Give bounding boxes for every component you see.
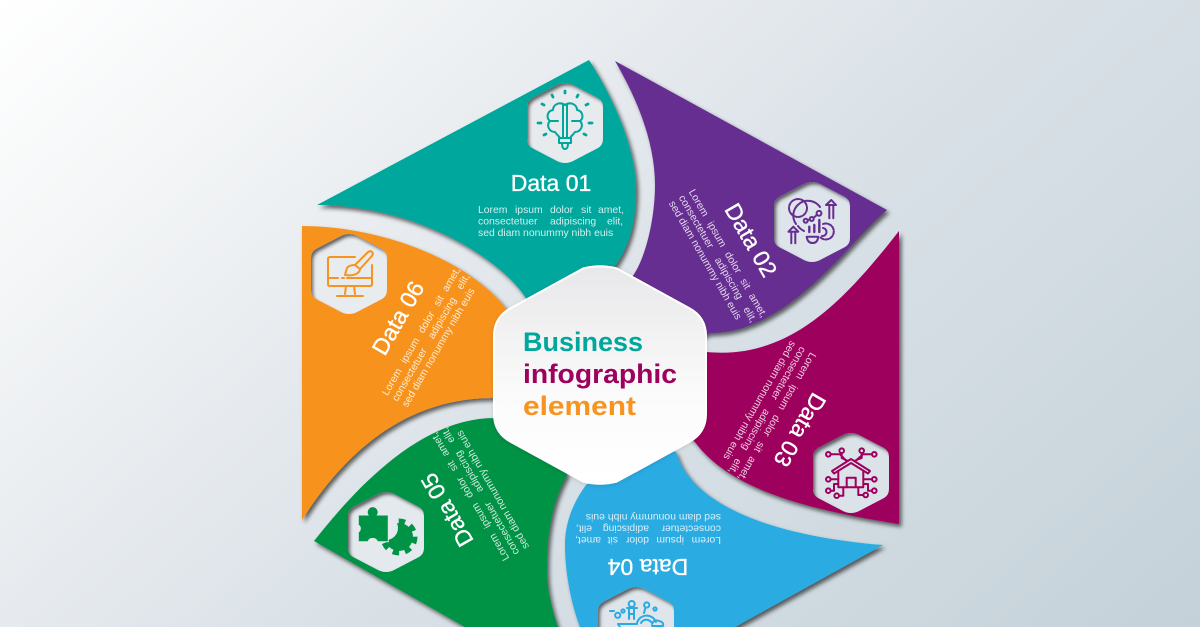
panel: Data 05 [314, 418, 567, 627]
text block: Data 06 body: dolor [417, 307, 439, 335]
text block: Data 01 body: ipsum [515, 205, 546, 216]
text block: Data 01 body: elit, [607, 216, 623, 228]
text block: Data 05 body: adipiscing [452, 446, 486, 494]
text block: Data 04 body: Lorem [689, 534, 721, 545]
text block: Data 05 body: amet, [430, 430, 452, 458]
text block: Data 05 body: sit [444, 456, 461, 473]
text block: Data 02 body: ipsum [704, 220, 729, 252]
text block: Data 04 body: adipiscing [600, 522, 649, 534]
text block: Data 05 body: Lorem [486, 529, 512, 562]
text block: Data 02 body: dolor [722, 250, 744, 278]
text block: Data 04 body: sit [605, 534, 618, 545]
text block: Data 06 body: Lorem [381, 364, 406, 398]
heading: Data 05: Data 05 [416, 469, 478, 551]
text block: Data 04 body: consectetuer [659, 522, 721, 534]
text block: Data 05 body: sed diam nonummy nibh euis [455, 428, 532, 551]
text block: Data 03 body: consectetuer [767, 345, 807, 404]
panel: Data 04 [565, 440, 883, 627]
heading: Data 02: Data 02 [720, 199, 782, 281]
text block: Data 03 body: adipiscing [737, 407, 771, 455]
text block: Data 03 body: sit [750, 439, 766, 456]
icon cutout: brain bulb [527, 83, 603, 163]
heading: Data 03: Data 03 [769, 389, 831, 471]
text block: Data 03 body: dolor [759, 413, 781, 441]
text block: Data 06 body: consectetuer [391, 344, 431, 403]
title: Business infographic element: element [523, 391, 636, 421]
text block: Data 02 body: amet, [746, 292, 768, 320]
text block: Data 01 body: adipiscing [550, 216, 599, 228]
text block: Data 01 body: sed diam nonummy nibh euis [478, 228, 613, 239]
segment: teal [317, 60, 636, 300]
text block: Data 04 body: elit, [576, 522, 592, 534]
text block: Data 04 body: ipsum [653, 534, 684, 545]
text block: Data 04 body: sed diam nonummy nibh euis [586, 511, 721, 522]
text block: Data 03 body: elit, [725, 456, 743, 476]
text block: Data 06 body: elit, [455, 272, 473, 292]
segment: green [314, 418, 567, 627]
text block: Data 04 body: dolor [623, 534, 649, 545]
text block: Data 02 body: consectetuer [676, 194, 717, 253]
text block: Data 01 body: amet, [598, 205, 624, 216]
text block: Data 05 body: dolor [454, 472, 476, 500]
title: Business infographic element: infographic [523, 359, 677, 389]
text block: Data 02 body: sit [737, 277, 754, 294]
segment: magenta [650, 231, 899, 524]
text block: Data 05 body: ipsum [469, 498, 494, 530]
text block: Data 06 body: sit [432, 292, 448, 309]
text block: Data 06 body: sed diam nonummy nibh euis [400, 287, 478, 409]
title: Business infographic element [523, 327, 677, 421]
text block: Data 03 body: sed diam nonummy nibh euis [720, 339, 798, 461]
panel: Data 01 [317, 60, 636, 300]
center hexagon [494, 266, 706, 484]
text block: Data 01 body: Lorem [478, 205, 510, 216]
panel: Data 02 [615, 61, 887, 340]
text block: Data 06 body: ipsum [399, 334, 424, 366]
text block: Data 02 body: Lorem [686, 188, 712, 221]
text block: Data 02 body: sed diam nonummy nibh euis [666, 199, 743, 322]
heading: Data 01: Data 01 [511, 170, 591, 196]
text block: Data 05 body: consectetuer [481, 497, 522, 556]
segment: purple [615, 61, 887, 340]
text block: Data 04 body: amet, [575, 534, 601, 545]
title: Business infographic element: Business [523, 327, 643, 357]
panel: Data 06 [302, 226, 520, 520]
text block: Data 02 body: adipiscing [712, 256, 746, 304]
heading: Data 04: Data 04 [608, 554, 688, 580]
icon cutout: gears and growth chart [774, 182, 850, 262]
icon cutout: idea cluster [598, 587, 674, 627]
text block: Data 01 body: sit [581, 205, 594, 216]
text block: Data 05 body: elit, [440, 425, 458, 445]
text block: Data 03 body: amet, [735, 454, 757, 482]
icon cutout: smart home [813, 433, 889, 513]
panel: Data 03 [650, 231, 899, 524]
text block: Data 06 body: adipiscing [427, 293, 461, 341]
text block: Data 01 body: consectetuer [478, 216, 540, 228]
text block: Data 02 body: elit, [740, 305, 758, 325]
text block: Data 06 body: amet, [441, 266, 463, 294]
heading: Data 06: Data 06 [367, 277, 429, 359]
hexagon plate [494, 266, 706, 484]
icon cutout: monitor and brush [311, 234, 387, 314]
icon cutout: puzzle and gear [348, 492, 424, 572]
text block: Data 01 body: dolor [550, 205, 576, 216]
segment: orange [302, 226, 520, 520]
text block: Data 03 body: Lorem [792, 350, 817, 384]
text block: Data 03 body: ipsum [774, 382, 799, 414]
segment: blue [565, 440, 883, 627]
